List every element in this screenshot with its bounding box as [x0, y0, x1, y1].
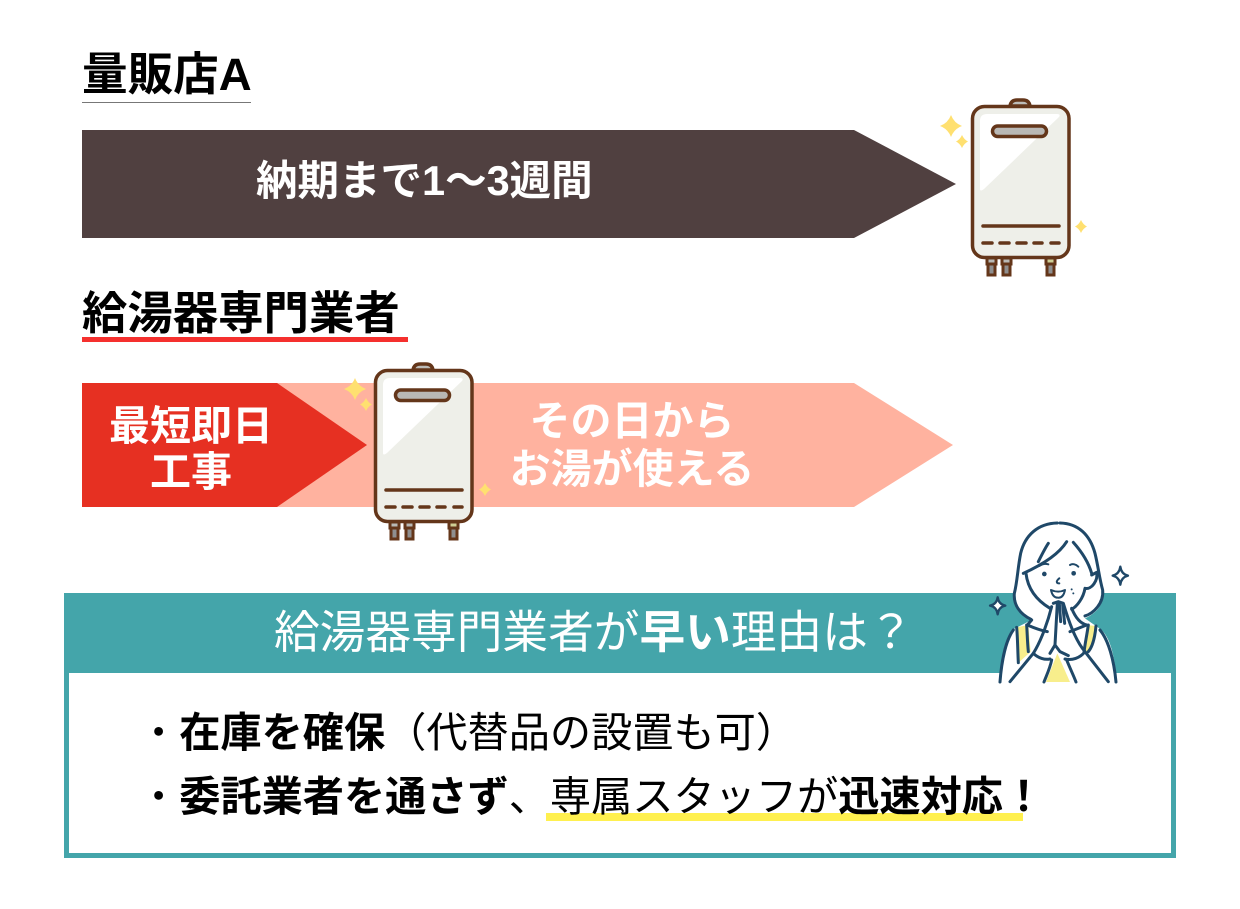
arrow: same-day installation: [82, 383, 367, 507]
panel: reasons box: [64, 593, 1176, 856]
arrow label: same-day installation: 工事: [150, 449, 232, 495]
icon: star right: [1113, 567, 1128, 585]
heading underline: mass retailer: [82, 102, 251, 103]
heading: specialist: 給湯器専門業者: [82, 288, 400, 339]
arrow label: hot water same day: その日から: [530, 398, 734, 444]
list item: stock: ・在庫を確保（代替品の設置も可）: [138, 710, 797, 756]
icon: sparkles, specialist: [344, 378, 491, 496]
arrow label: hot water same day: [510, 398, 754, 492]
icon: sparkles, retailer: [940, 115, 1087, 233]
panel title: 給湯器専門業者が早い理由は？: [274, 607, 914, 658]
arrow label: same-day installation: [109, 403, 273, 495]
icon: star left: [990, 597, 1005, 614]
icon: water heater, specialist: [376, 364, 472, 539]
icon: water heater, retailer: [972, 100, 1069, 275]
arrow: same-day hot water: [277, 383, 953, 507]
highlight: yellow underline: [546, 813, 1023, 821]
arrow label: same-day installation: 最短即日: [109, 403, 273, 449]
arrow: delivery 1 to 3 weeks: [82, 130, 956, 238]
icon: woman with hands together: [990, 523, 1128, 683]
arrow label: hot water same day: お湯が使える: [510, 446, 754, 492]
heading underline: specialist: [82, 337, 408, 342]
arrow label: delivery time: 納期まで1〜3週間: [256, 157, 593, 204]
heading: mass retailer A: 量販店A: [82, 49, 252, 100]
list item: dedicated staff: ・委託業者を通さず、専属スタッフが迅速対応！: [138, 774, 1044, 820]
